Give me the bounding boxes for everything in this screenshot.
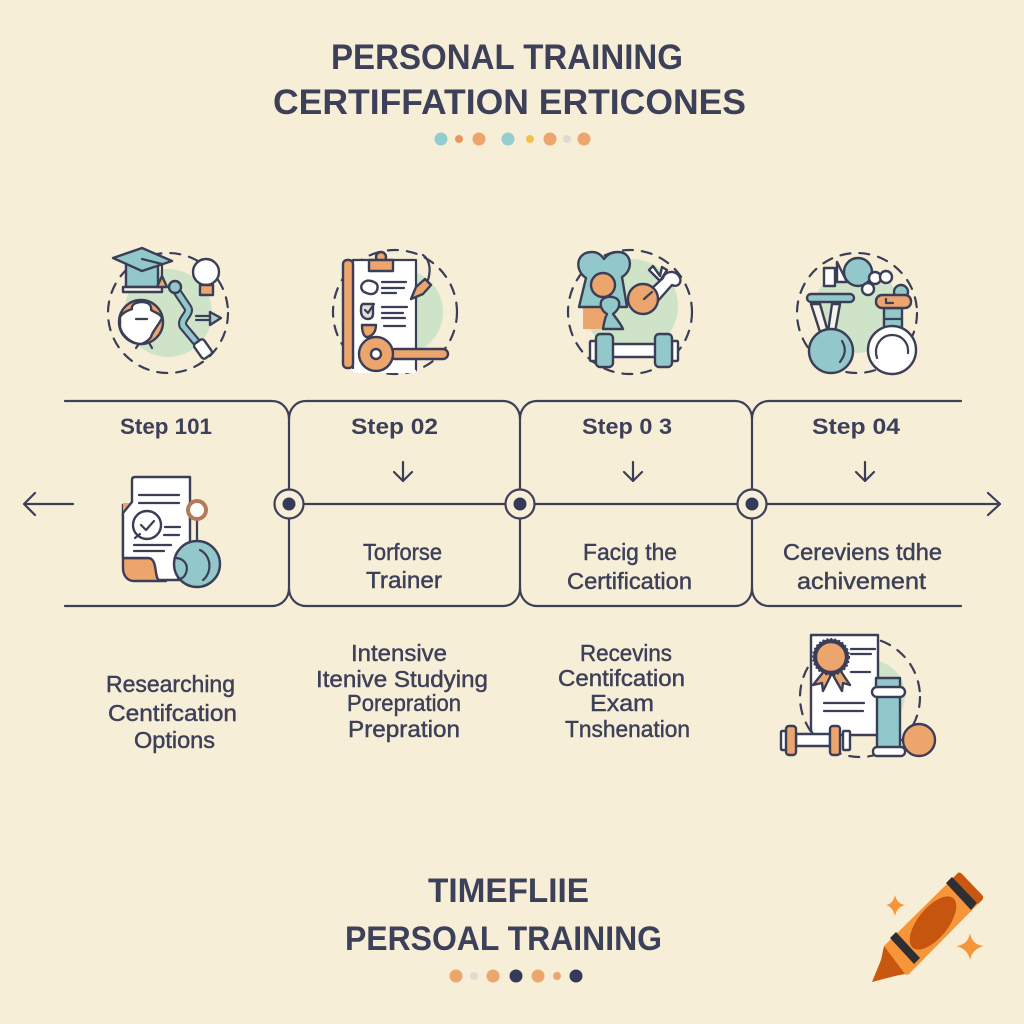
lower text: studying: Intensive	[351, 640, 447, 666]
step labels: Step 04	[812, 414, 901, 439]
step labels: Step 0 3	[582, 414, 672, 439]
lower text: exam: Exam	[590, 690, 654, 716]
icon: certificate and equipment	[781, 635, 935, 757]
title dots	[434, 132, 590, 146]
lower text: exam	[558, 640, 690, 742]
footer title	[345, 872, 662, 958]
footer dots	[450, 970, 582, 982]
timeline node 3	[738, 490, 766, 518]
timeline node 1	[274, 490, 304, 518]
left arrow	[24, 493, 73, 515]
footer title: TIMEFLIIE	[428, 872, 589, 910]
lower text: researching: Centifcation	[108, 700, 237, 726]
icon: kettlebell and plate	[797, 253, 917, 374]
down arrow 4	[856, 462, 874, 481]
title: PERSONAL TRAINING	[331, 38, 683, 77]
step 2 description: Trainer	[366, 567, 442, 593]
step labels: Step 02	[351, 414, 438, 439]
step 2 description	[363, 539, 442, 593]
step 4 description	[783, 539, 942, 594]
right arrow	[988, 493, 1000, 515]
icon: graduation research	[108, 248, 228, 373]
lower text: studying: Itenive Studying	[316, 666, 488, 692]
lower text: exam: Centifcation	[558, 665, 685, 691]
step 3 description	[567, 539, 692, 594]
lower text: researching	[106, 671, 237, 753]
lower text: researching: Researching	[106, 671, 235, 697]
step 4 description: achivement	[797, 568, 927, 594]
timeline node 2	[506, 490, 534, 518]
step 3 description: Certification	[567, 568, 692, 594]
icon: sparkle small	[886, 895, 905, 916]
title	[273, 38, 746, 122]
step 3 description: Facig the	[583, 539, 677, 565]
lower text: studying: Prepration	[348, 716, 460, 742]
footer title: PERSOAL TRAINING	[345, 920, 662, 958]
lower text: exam: Tnshenation	[565, 716, 690, 742]
icon: coaching and dumbbell	[568, 250, 692, 374]
icon: crayon	[872, 872, 983, 982]
down arrow 3	[624, 462, 642, 481]
icon: document with check	[123, 477, 220, 587]
lower text: studying	[316, 640, 488, 742]
down arrow 2	[394, 462, 412, 481]
step labels: Step 101	[120, 414, 212, 439]
timeline frame	[65, 401, 1000, 606]
title: CERTIFFATION ERTICONES	[273, 83, 746, 122]
lower text: researching: Options	[134, 727, 215, 753]
icon: clipboard checklist	[333, 250, 457, 374]
step 4 description: Cereviens tdhe	[783, 539, 942, 565]
icon: sparkle large	[956, 933, 984, 960]
lower text: exam: Recevins	[580, 640, 672, 666]
step labels	[120, 414, 901, 439]
lower text: studying: Porepration	[347, 690, 461, 716]
step 2 description: Torforse	[363, 539, 442, 565]
